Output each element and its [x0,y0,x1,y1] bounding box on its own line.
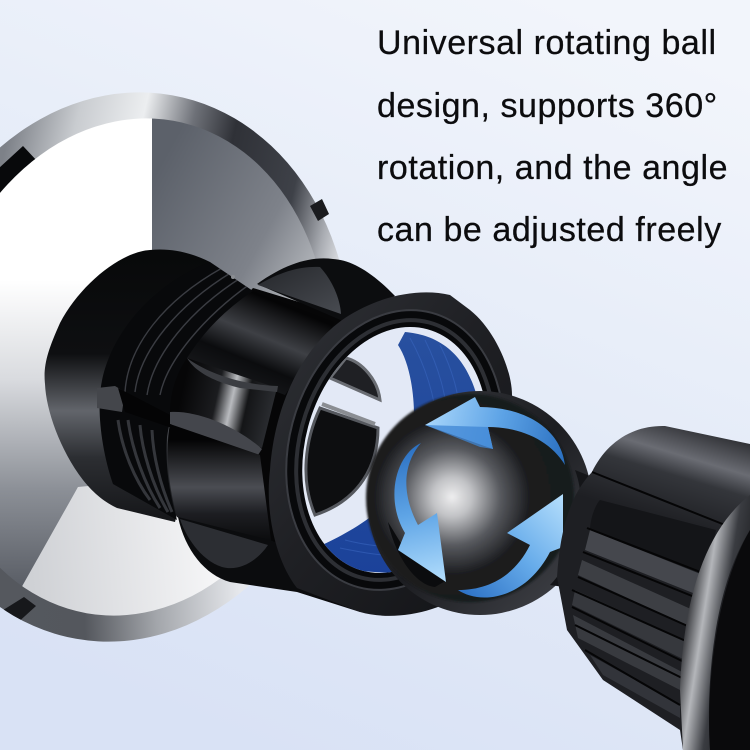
middle body [168,258,395,612]
ball socket slot [388,522,447,587]
lower clip [306,408,378,515]
disc grey sector [152,118,315,302]
arrow: left [394,443,446,582]
rim marker: upper left [0,146,36,193]
lower body [168,424,272,548]
grey slit [97,386,125,412]
lower tab [178,517,360,612]
thread nick [231,275,235,279]
upper notch [187,358,278,392]
rear cap of mount [45,250,230,522]
arrow: lower right [458,494,563,598]
rotating ball [366,391,592,615]
upper clip [330,358,380,400]
suction disc [0,92,339,642]
holder knob [550,426,750,750]
front ring [268,292,512,616]
caption text: rotation, and the angle [377,149,728,187]
disc upper-left light sector [0,100,152,600]
rim marker: bottom left [4,597,36,620]
blue ribbed band [324,332,476,573]
lower notch [170,412,262,455]
ridge line [592,472,725,525]
caption text: can be adjusted freely [377,211,722,249]
rim marker: right [310,199,329,221]
silver collar [680,495,750,750]
neck joint [550,470,600,590]
upper body [187,291,335,395]
disc lower light sector [22,486,220,616]
caption text [377,24,728,249]
caption text: Universal rotating ball [377,24,717,62]
body backing [150,288,345,590]
caption text: design, supports 360° [377,87,718,125]
arrow: top [425,397,565,465]
knurled grip [572,500,716,718]
threaded neck [97,262,253,520]
shiny centre strip [170,358,277,448]
upper tab [257,258,395,322]
ring interior [302,327,483,573]
